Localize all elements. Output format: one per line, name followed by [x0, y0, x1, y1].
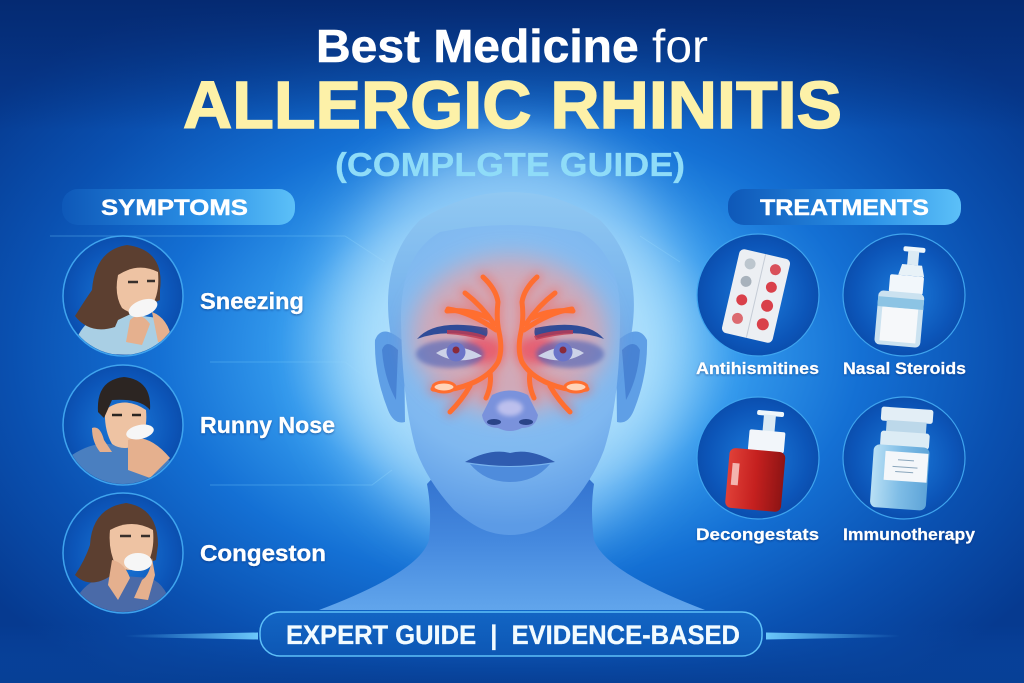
symptoms heading [62, 189, 295, 225]
symptom label: Sneezing [200, 288, 304, 314]
eyes [416, 340, 604, 368]
face [401, 225, 620, 535]
symptom: congestion [63, 493, 183, 613]
title [183, 20, 842, 183]
treatment label: Decongestats [696, 526, 819, 544]
title line 1: Best Medicine for [316, 20, 708, 72]
treatment label: Antihismitines [696, 360, 819, 378]
panel: treatments [696, 189, 976, 544]
treatment: antihistamines blister pack [697, 234, 819, 356]
head illustration [319, 140, 705, 610]
hair cap [388, 192, 634, 370]
treatment label: Immunotherapy [843, 526, 976, 544]
ears [375, 331, 647, 422]
symptom label: Runny Nose [200, 412, 335, 438]
eyebrows [417, 325, 604, 340]
symptom: runny nose [63, 365, 183, 490]
bottom banner: EXPERT GUIDE | EVIDENCE-BASED [286, 620, 740, 650]
symptom label: Congeston [200, 540, 326, 566]
treatment: immunotherapy vial [843, 397, 965, 519]
symptom: sneezing [63, 236, 183, 356]
treatments heading [728, 189, 961, 225]
treatments heading: TREATMENTS [760, 195, 929, 220]
neck and shoulders [319, 470, 705, 610]
treatment: decongestants bottle [697, 397, 819, 519]
mouth [465, 452, 555, 482]
nose [482, 390, 538, 431]
red inflammation glow [412, 257, 608, 413]
bottom banner [125, 612, 900, 656]
treatment: nasal steroids spray [843, 234, 965, 356]
subtitle: (COMPLGTE GUIDE) [335, 146, 685, 183]
title line 2: ALLERGIC RHINITIS [183, 68, 842, 143]
symptoms heading: SYMPTOMS [101, 195, 248, 220]
decorative circuit lines [50, 236, 680, 485]
panel: symptoms [62, 189, 335, 613]
sinus network [433, 277, 587, 412]
treatment label: Nasal Steroids [843, 360, 966, 378]
